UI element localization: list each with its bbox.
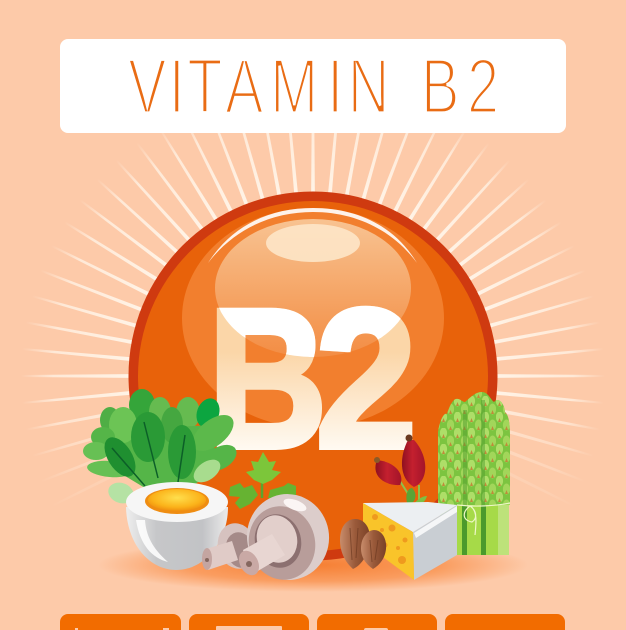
tab 1 xyxy=(60,614,181,630)
icon: egg xyxy=(126,482,228,570)
yolk xyxy=(145,488,209,514)
icon: almonds xyxy=(340,519,386,569)
tab 3 xyxy=(317,614,437,630)
B2 label xyxy=(216,306,412,450)
title banner xyxy=(60,39,566,133)
title text: VITAMIN B2 xyxy=(128,43,499,130)
icon: spinach xyxy=(83,389,241,507)
icon: large mushroom xyxy=(235,488,336,587)
highlight oval xyxy=(266,224,360,262)
icon: rose hips xyxy=(374,434,427,506)
B2 label: 2 xyxy=(316,269,417,490)
bottom tabs row xyxy=(60,614,565,630)
highlight crescent xyxy=(208,208,417,263)
ground glow xyxy=(98,538,528,592)
icon: parsley xyxy=(229,452,296,509)
B2 label: 2 xyxy=(316,269,417,490)
vitamin sphere xyxy=(128,192,498,560)
tab 4 xyxy=(445,614,565,630)
icon: cheese xyxy=(363,502,457,580)
B2 label: B xyxy=(208,267,327,489)
tab 2 xyxy=(189,614,309,630)
string xyxy=(457,503,510,535)
icon: asparagus xyxy=(438,392,510,555)
icon: small mushroom xyxy=(202,519,261,573)
B2 label: B xyxy=(208,267,327,489)
sunburst rays xyxy=(21,84,605,508)
